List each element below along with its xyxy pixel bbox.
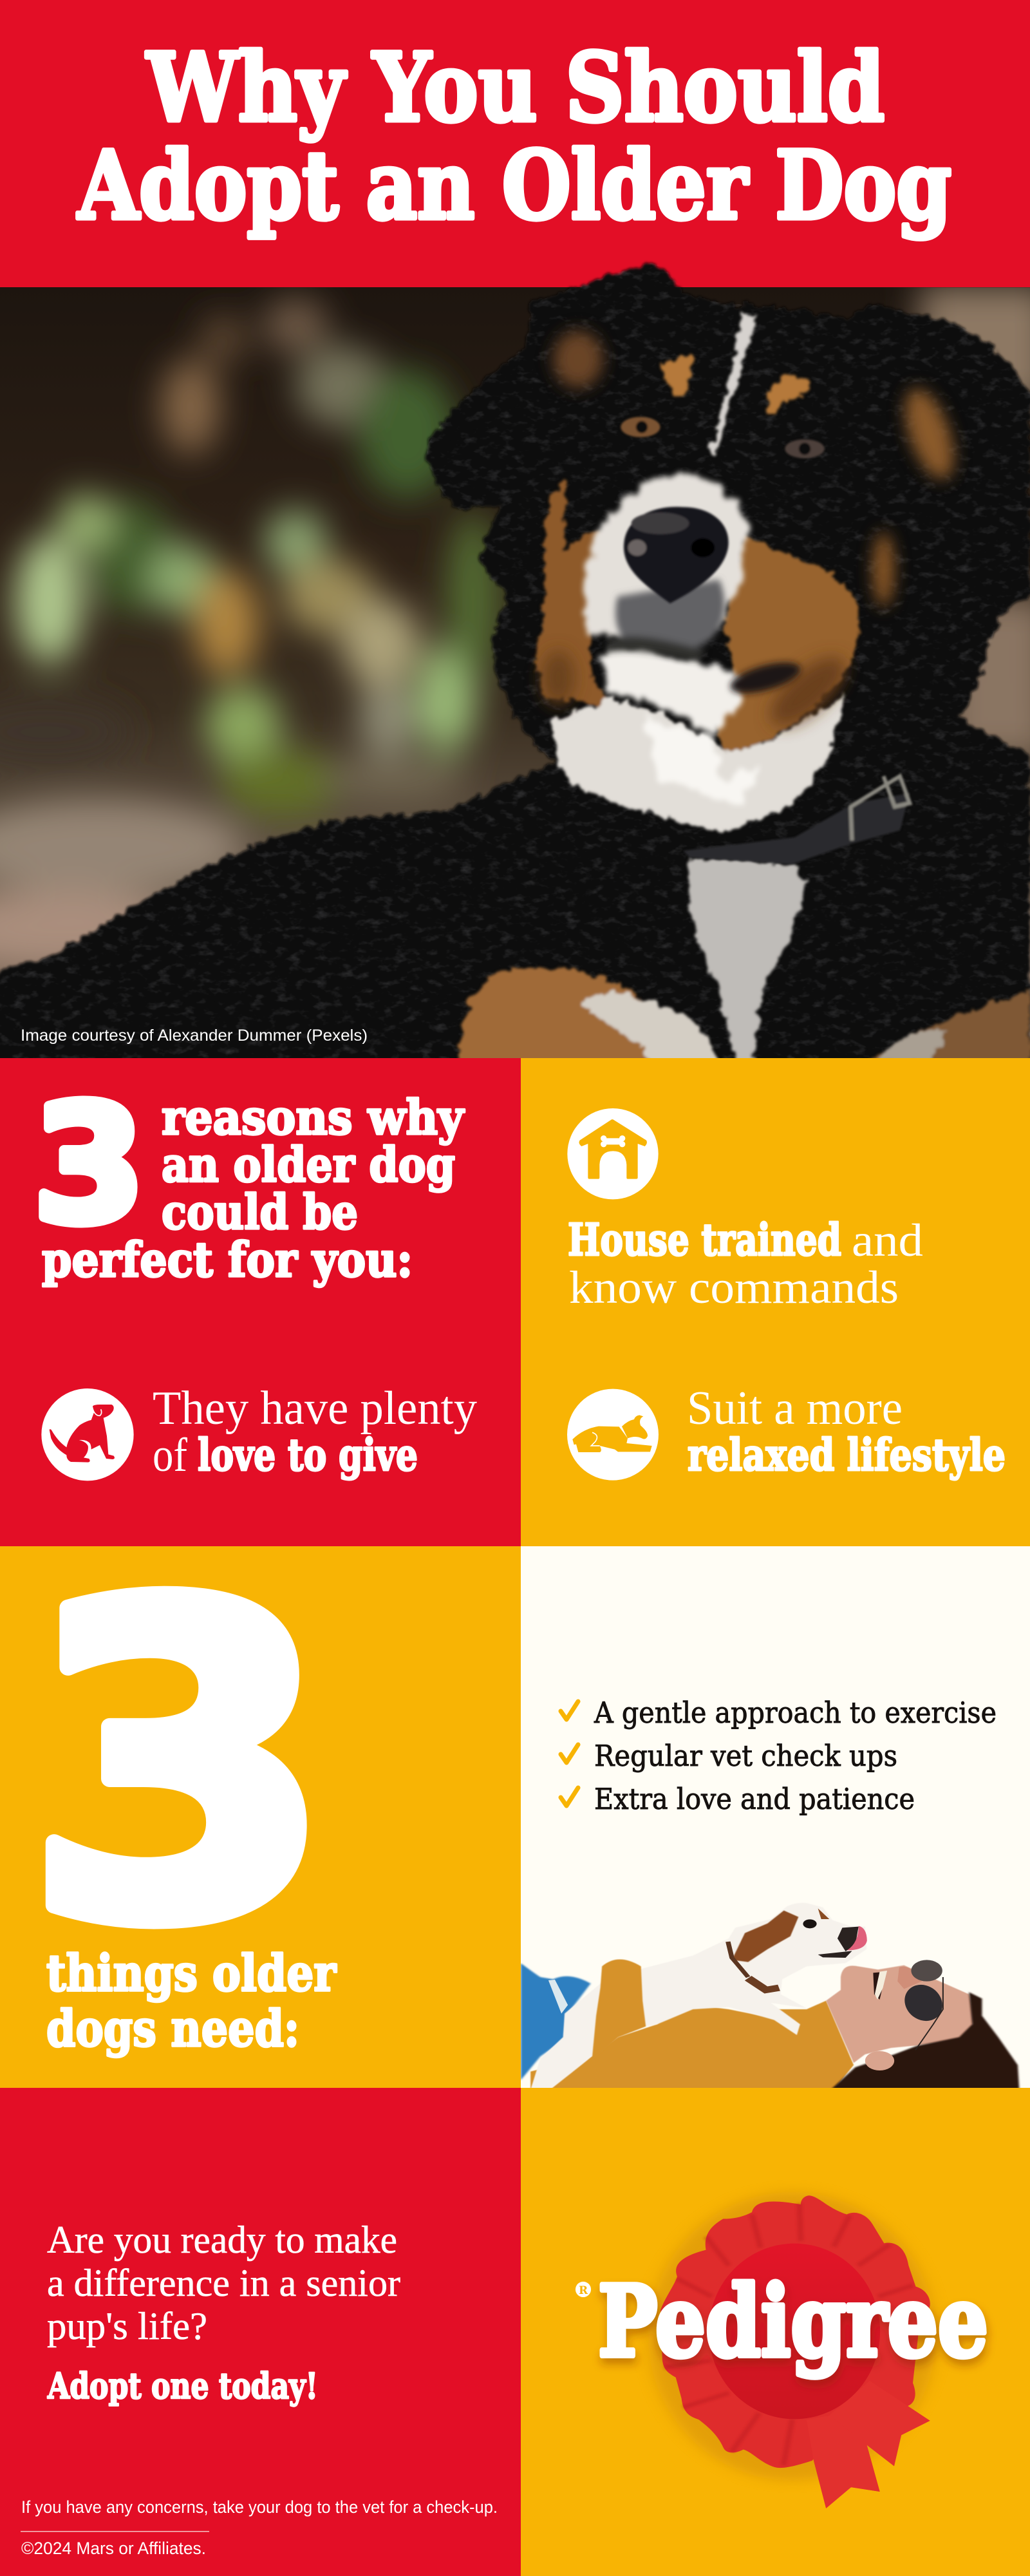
footnote: If you have any concerns, take your dog to the vet for a check-up. xyxy=(21,2497,498,2517)
text: plenty of love to give xyxy=(153,1382,477,1482)
panel: 3 things older dogs need: dogs need: xyxy=(46,2000,299,2058)
panel: 3 reasons heading and love to give: perfect for you: xyxy=(42,1233,413,1288)
checklist xyxy=(561,1696,997,1816)
panel: 3 reasons heading and love to give: an older dog xyxy=(162,1137,455,1193)
title xyxy=(77,33,951,241)
text: suit a more relaxed lifestyle xyxy=(687,1382,1006,1481)
dog face markings xyxy=(460,313,1030,1065)
panel: 3 things older dogs need xyxy=(0,1515,521,2088)
panel: call to action xyxy=(0,2088,521,2576)
photo caption: Image courtesy of Alexander Dummer (Pexels) xyxy=(21,1027,368,1045)
panel: house trained and relaxed lifestyle xyxy=(521,1058,1030,1546)
icon: dog house xyxy=(567,1108,659,1199)
text: suit a more relaxed lifestyle: Suit a more xyxy=(687,1382,903,1435)
panel: call to action: pup's life? xyxy=(47,2305,207,2347)
dog silhouette xyxy=(0,263,1030,1065)
dog fur texture xyxy=(0,258,1030,1058)
text: house trained and know commands: and xyxy=(852,1215,923,1266)
panel: 3 things older dogs need: 3 xyxy=(24,1515,333,2017)
panel: call to action: Adopt one today! xyxy=(47,2365,318,2407)
panel: Pedigree logo xyxy=(521,2088,1030,2576)
panel: 3 reasons heading and love to give: 3 xyxy=(33,1071,145,1258)
icon: sitting dog xyxy=(41,1388,134,1481)
panel: 3 reasons heading and love to give: reasons why xyxy=(162,1090,465,1146)
text: plenty of love to give: love to give xyxy=(198,1430,418,1481)
panel: 3 things older dogs need: things older xyxy=(46,1944,337,2003)
text: plenty of love to give: They have plenty xyxy=(153,1382,477,1435)
text: house trained and know commands: House trained xyxy=(568,1215,841,1266)
logo rosette: R xyxy=(579,2284,588,2297)
checklist: Regular vet check ups xyxy=(594,1739,897,1773)
panel: call to action: Are you ready to make xyxy=(47,2219,397,2261)
logo rosette xyxy=(576,2192,936,2508)
panel: call to action: a difference in a senior xyxy=(47,2262,400,2304)
photo: Bernese mountain dog xyxy=(0,258,1030,1065)
checklist: Extra love and patience xyxy=(594,1782,915,1816)
text: house trained and know commands xyxy=(568,1215,923,1313)
text: plenty of love to give: of xyxy=(153,1429,187,1482)
panel: checklist and photo xyxy=(521,1546,1030,2091)
panel: 3 reasons heading and love to give: could be xyxy=(162,1185,358,1240)
photo: woman with small dog xyxy=(521,1903,1019,2091)
header band xyxy=(0,0,1030,287)
text: house trained and know commands: know commands xyxy=(569,1262,899,1313)
copyright: ©2024 Mars or Affiliates. xyxy=(21,2539,206,2558)
icon: lying dog xyxy=(567,1389,659,1481)
panel: 3 reasons heading and love to give xyxy=(0,1058,521,1546)
checklist: A gentle approach to exercise xyxy=(594,1696,997,1730)
title: Why You Should xyxy=(145,33,885,143)
